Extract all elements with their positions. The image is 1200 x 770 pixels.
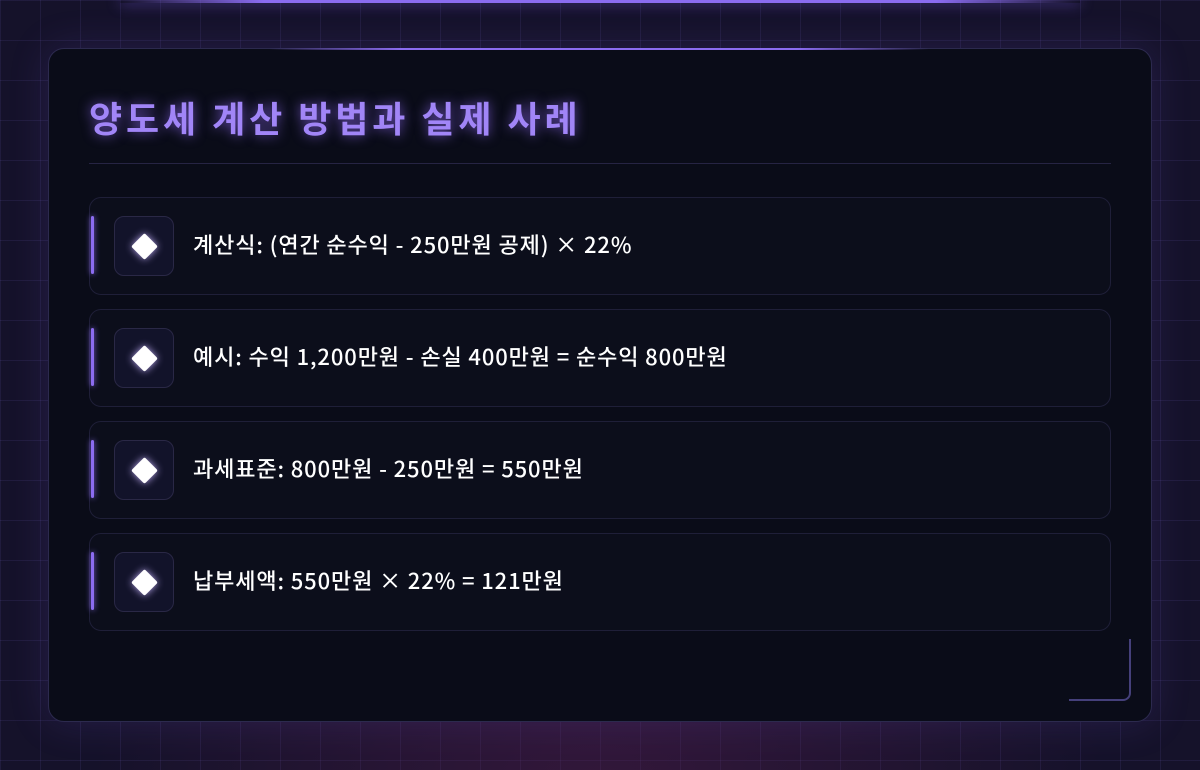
item: tax base bbox=[89, 421, 1111, 519]
icon: diamond bbox=[114, 328, 174, 388]
item: formula bbox=[89, 197, 1111, 295]
text: 과세표준: 800만원 - 250만원 = 550만원 bbox=[193, 452, 584, 484]
text: 납부세액: 550만원 × 22% = 121만원 bbox=[193, 564, 564, 596]
item: example bbox=[89, 309, 1111, 407]
text: 계산식: (연간 순수익 - 250만원 공제) × 22% bbox=[193, 228, 632, 260]
icon: diamond bbox=[114, 440, 174, 500]
title: 양도세 계산 방법과 실제 사례 bbox=[89, 91, 582, 143]
corner accent bbox=[1069, 639, 1131, 701]
icon: diamond bbox=[114, 216, 174, 276]
icon: diamond bbox=[114, 552, 174, 612]
item: tax payable bbox=[89, 533, 1111, 631]
text: 예시: 수익 1,200만원 - 손실 400만원 = 순수익 800만원 bbox=[193, 340, 728, 372]
